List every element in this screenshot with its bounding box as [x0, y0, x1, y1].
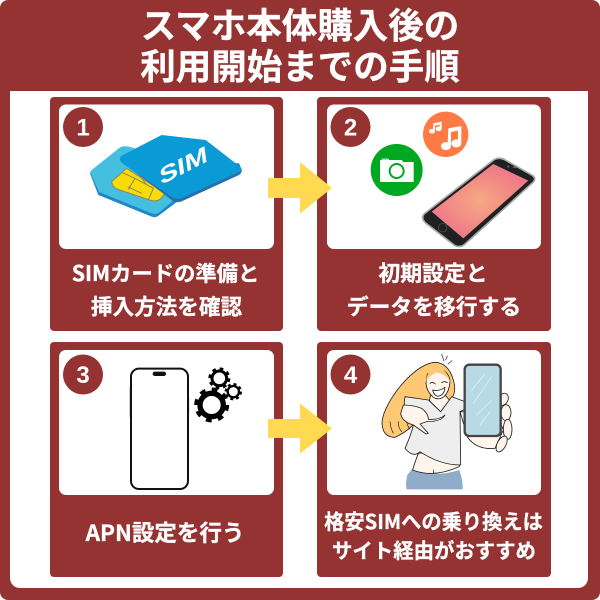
- icon: SIM cards: [90, 135, 242, 217]
- title: 利用開始までの手順: [140, 39, 460, 90]
- arrow: step 1 to 2: [268, 162, 332, 214]
- caption 2: 初期設定と: [378, 257, 488, 288]
- icon: music: [423, 112, 468, 157]
- icon: phone outline: [129, 369, 189, 489]
- caption 4: [324, 506, 543, 564]
- caption 2: [347, 257, 521, 322]
- number badge 4: 4: [344, 362, 358, 389]
- panel: step 1: [50, 97, 283, 331]
- caption 1: SIMカードの準備と: [72, 257, 259, 288]
- caption 4: 格安SIMへの乗り換えは: [324, 506, 543, 535]
- panel: step 2: [317, 97, 551, 331]
- number badge 3: [63, 354, 103, 394]
- icon: camera: [371, 144, 423, 196]
- icon: SIM cards: SIM: [158, 141, 209, 190]
- caption 3: APN設定を行う: [85, 516, 244, 548]
- caption 2: データを移行する: [347, 290, 521, 322]
- number badge 2: [330, 107, 370, 147]
- number badge 3: 3: [76, 362, 90, 389]
- caption 4: サイト経由がおすすめ: [332, 534, 536, 564]
- white content panel: [10, 91, 588, 588]
- caption 1: [72, 257, 259, 322]
- icon: gears: [196, 369, 241, 420]
- number badge 4: [330, 354, 370, 394]
- illustration: woman with phone: [382, 354, 512, 489]
- arrow: step 3 to 4: [268, 404, 332, 454]
- icon: smartphone: [423, 158, 535, 247]
- number badge 2: 2: [344, 114, 357, 142]
- number badge 1: 1: [76, 114, 90, 142]
- panel: step 4: [317, 342, 551, 577]
- title: [140, 0, 460, 90]
- caption 1: 挿入方法を確認: [91, 290, 242, 322]
- number badge 1: [63, 107, 103, 147]
- panel: step 3: [50, 342, 283, 577]
